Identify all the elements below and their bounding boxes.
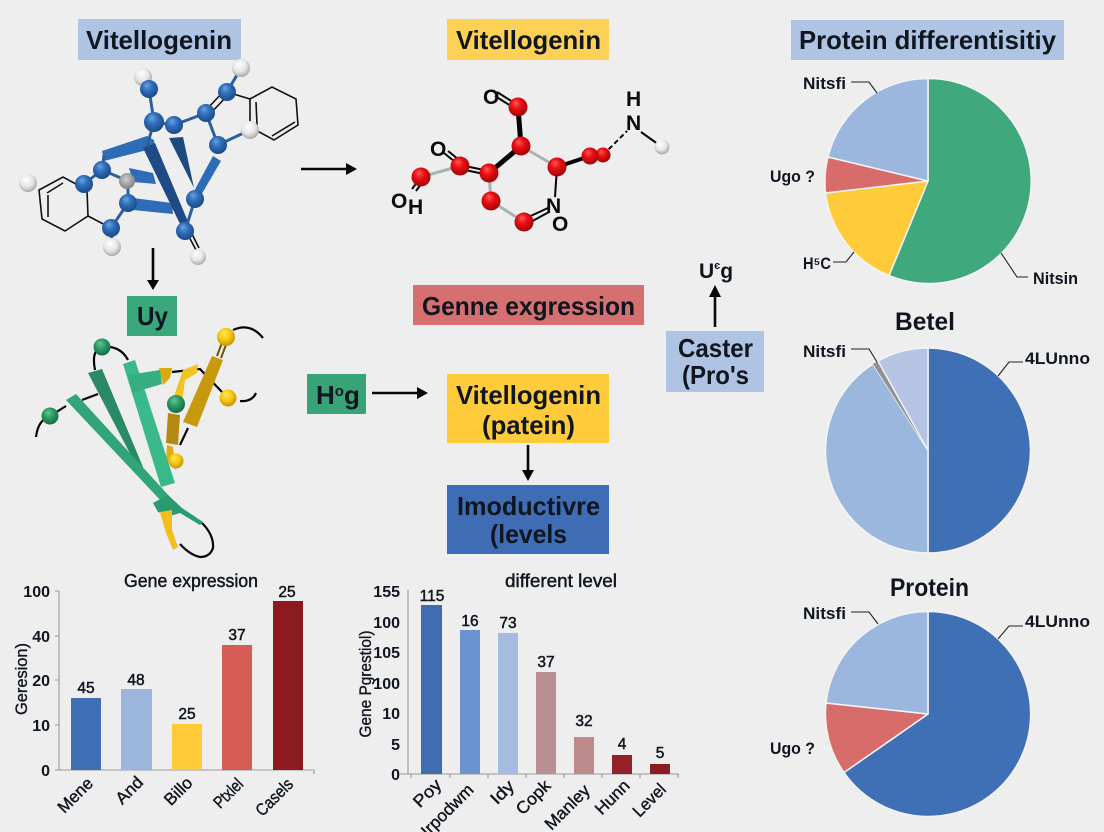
bar values [420,588,664,762]
heading: Vitellogenin blue [78,19,241,60]
category labels: Poy [409,775,446,811]
label box: Uy [127,296,177,336]
label box: Hog: g [344,380,360,410]
protein ribbon: green and yellow [36,327,263,557]
y axis ticks: 10 [382,706,400,723]
label box: Hog [307,374,366,414]
category labels: Copk [512,776,555,819]
heading: Protein differentisitiy: Protein differentisitiy [799,25,1057,55]
heading: Vitellogenin yellow [447,19,609,60]
category labels: Hunn [591,776,634,819]
molecule: red ball and stick structure: H [408,196,423,219]
label box: Caster (Pro's: (Pro's [682,360,749,390]
y axis ticks: 155 [373,584,400,601]
molecule: red ball and stick structure: H [626,88,641,111]
arrow: up to Ueg [709,285,721,327]
y axis ticks: 20 [32,673,50,690]
label box: Uy: Uy [137,301,168,331]
category labels: Mene [54,774,97,817]
y axis title: Gene Pgrestiol) [357,630,375,738]
pie title: Betel [895,308,955,336]
label: Ueg: є [714,260,720,272]
label: Ueg: U [699,260,714,283]
bar values: 37 [228,627,246,644]
label box: Genne exgression: Genne exgression [422,291,635,321]
label box: Caster (Pro's: Caster [678,333,753,363]
pie chart: protein differentisitiy [770,75,1078,288]
label: Ueg: g [720,260,733,283]
pie chart: Betel: 4LUnno [1025,350,1090,368]
bar chart: different level [357,571,679,832]
category labels: Ptxlel [210,775,247,812]
label box: Imoductivre (levels: (levels [490,519,567,549]
pie chart: protein differentisitiy: Nitsin [1033,270,1078,288]
y axis ticks: 105 [373,645,400,662]
category labels: Casels [252,775,297,820]
molecule: red ball and stick structure: O [552,213,568,236]
chart title: Gene expression [124,571,258,591]
bar values: 5 [656,745,664,762]
molecule: red ball and stick structure [391,86,670,236]
label box: Caster (Pro's [666,331,764,392]
y axis ticks: 0 [41,763,50,780]
pie chart: Betel: Nitsfi [803,343,846,361]
y axis ticks: 100 [23,584,50,601]
y axis ticks [373,584,400,784]
bar values: 25 [178,706,196,723]
pie chart: protein differentisitiy: H⁵C [803,255,831,273]
y axis ticks [23,584,50,780]
molecule: red ball and stick structure: O [391,190,407,213]
bar chart: Gene expression [13,571,314,820]
label box: Hog: o [335,383,344,400]
pie chart: protein differentisitiy: Ugo ? [770,168,815,186]
pie chart: Protein [770,574,1090,816]
y axis title: Geresion) [13,643,31,715]
bar values: 25 [278,584,296,601]
bar values [77,584,296,723]
arrow: right to red molecule [301,163,357,175]
bar values: 48 [127,672,145,689]
molecule: blue ball and stick structure [19,59,298,265]
category labels: And [112,773,147,808]
y axis ticks: 5 [391,737,400,754]
arrow: down to Imoductivre [522,445,534,481]
bars [421,605,670,774]
arrow: down to Uy [147,248,159,290]
bar values: 4 [618,736,627,753]
pie chart: Betel [803,308,1090,553]
bar values: 73 [499,615,517,632]
pie title: Protein [890,574,969,602]
bars [71,601,303,770]
category labels [54,773,297,820]
category labels: Billo [160,773,196,809]
bar values: 45 [77,680,95,697]
category labels: Idy [486,776,519,808]
y axis ticks: 100 [373,615,400,632]
bar values: 32 [575,713,593,730]
heading: Vitellogenin blue: Vitellogenin [86,25,232,55]
y axis ticks: 10 [32,718,50,735]
category labels [409,775,670,832]
heading: Vitellogenin yellow: Vitellogenin [456,25,601,55]
label box: Hog: H [316,380,335,410]
molecule: red ball and stick structure: O [483,86,499,109]
label box: Vitellogenin (patein): Vitellogenin [456,380,601,410]
molecule: red ball and stick structure: N [626,112,641,135]
y axis ticks: 100 [373,676,400,693]
chart title: different level [505,571,617,591]
pie chart: Protein: Ugo ? [770,740,815,758]
y axis ticks: 0 [391,767,400,784]
bar values: 115 [420,588,444,605]
pie chart: Protein: 4LUnno [1025,613,1090,631]
label box: Imoductivre (levels [447,485,609,554]
category labels: Level [629,780,670,821]
pie chart: Protein: Nitsfi [803,605,846,623]
bar values: 16 [461,613,479,630]
molecule: red ball and stick structure: O [430,138,446,161]
molecule: red ball and stick structure: N [546,195,561,218]
label box: Vitellogenin (patein): (patein) [482,410,575,440]
pie chart: protein differentisitiy: Nitsfi [803,75,846,93]
y axis ticks: 40 [32,629,50,646]
arrow: Hog to Vitellogenin [372,387,428,399]
label box: Vitellogenin (patein) [447,374,609,443]
label box: Imoductivre (levels: Imoductivre [457,491,600,521]
bar values: 37 [537,654,555,671]
